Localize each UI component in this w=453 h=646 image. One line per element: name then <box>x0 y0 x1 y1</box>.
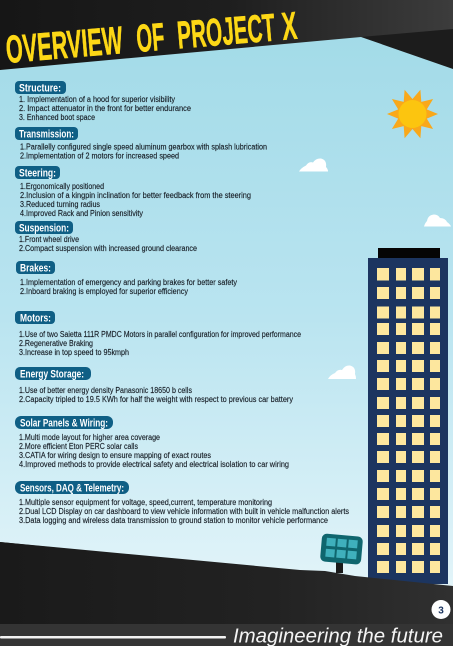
section: suspension: 2.Compact suspension with increased ground clearance <box>19 244 197 253</box>
section: brakes: Brakes: <box>20 262 51 274</box>
section: energy storage: 2.Capacity tripled to 19.5 KWh for half the weight with respect to previous car battery <box>19 395 293 404</box>
section: solar panels and wiring: 1.Multi mode layout for higher area coverage <box>19 433 160 442</box>
icon: cloud 3 <box>328 365 356 379</box>
section: sensors, DAQ and telemetry: 1.Multiple sensor equipment for voltage, speed,current, temperature monitoring <box>19 498 272 507</box>
section: structure <box>15 81 192 122</box>
building <box>368 248 448 584</box>
footer divider line <box>0 636 226 638</box>
section: brakes: 2.Inboard braking is employed for superior efficiency <box>20 287 188 296</box>
section: steering <box>15 166 251 218</box>
section: solar panels and wiring: Solar Panels & Wiring: <box>20 418 108 430</box>
section: suspension <box>15 221 197 253</box>
section: suspension: Suspension: <box>19 222 69 234</box>
page number badge <box>432 600 450 619</box>
section: structure: 3. Enhanced boot space <box>19 113 95 122</box>
section: motors: 2.Regenerative Braking <box>19 339 93 348</box>
icon: cloud 2 <box>424 214 451 226</box>
section: sensors, DAQ and telemetry: 2.Dual LCD Display on car dashboard to view vehicle information with built in vehicle malfunction alerts <box>19 507 349 516</box>
section: energy storage: Energy Storage: <box>20 368 84 380</box>
section: structure: 1. Implementation of a hood for superior visibility <box>19 95 175 104</box>
header band <box>0 0 453 80</box>
icon: solar panel <box>320 533 363 573</box>
section: sensors, DAQ and telemetry: 3.Data logging and wireless data transmission to ground station to monitor vehicle performance <box>19 516 328 525</box>
section: solar panels and wiring: 3.CATIA for wiring design to ensure mapping of exact routes <box>19 451 211 460</box>
section: motors <box>15 311 301 357</box>
section: solar panels and wiring: 4.Improved methods to provide electrical safety and electrical isolation to car wiring <box>19 460 289 469</box>
section: suspension: 1.Front wheel drive <box>19 235 79 244</box>
title <box>4 5 299 72</box>
section: steering: 1.Ergonomically positioned <box>20 182 104 191</box>
section: energy storage <box>15 367 293 404</box>
footer band <box>0 624 453 646</box>
page number badge: 3 <box>438 606 444 616</box>
section: transmission: Transmission: <box>19 128 74 140</box>
section: motors: 1.Use of two Saietta 111R PMDC Motors in parallel configuration for improved performance <box>19 330 301 339</box>
section: sensors, DAQ and telemetry: Sensors, DAQ & Telemetry: <box>20 482 124 494</box>
section: brakes: 1.Implementation of emergency and parking brakes for better safety <box>20 278 237 287</box>
section: solar panels and wiring: 2.More efficient Eton PERC solar calls <box>19 442 138 451</box>
title: OF <box>135 16 166 61</box>
ground band <box>0 542 453 646</box>
section: transmission: 2.Implementation of 2 motors for increased speed <box>20 152 179 160</box>
section: energy storage: 1.Use of better energy density Panasonic 18650 b cells <box>19 386 192 395</box>
title: OVERVIEW <box>4 19 124 72</box>
section: brakes <box>16 261 237 296</box>
title: X <box>280 5 299 49</box>
icon: sun <box>387 90 438 138</box>
icon: cloud 1 <box>299 158 328 172</box>
section: sensors, DAQ and telemetry <box>15 481 349 525</box>
section: steering: 4.Improved Rack and Pinion sensitivity <box>20 209 143 218</box>
section: structure: Structure: <box>19 82 61 94</box>
section: structure: 2. Impact attenuator in the front for better endurance <box>19 104 192 113</box>
section: transmission: 1.Parallelly configured single speed aluminum gearbox with splash lubrication <box>20 142 267 152</box>
title: PROJECT <box>176 7 277 58</box>
section: steering: 2.Inclusion of a kingpin inclination for better feedback from the steering <box>20 191 251 200</box>
section: solar panels and wiring <box>15 416 289 469</box>
section: transmission <box>15 127 267 160</box>
section: motors: 3.Increase in top speed to 95kmph <box>19 348 129 357</box>
section: motors: Motors: <box>20 312 51 324</box>
section: steering: Steering: <box>19 168 56 180</box>
section: steering: 3.Reduced turning radius <box>20 200 100 209</box>
